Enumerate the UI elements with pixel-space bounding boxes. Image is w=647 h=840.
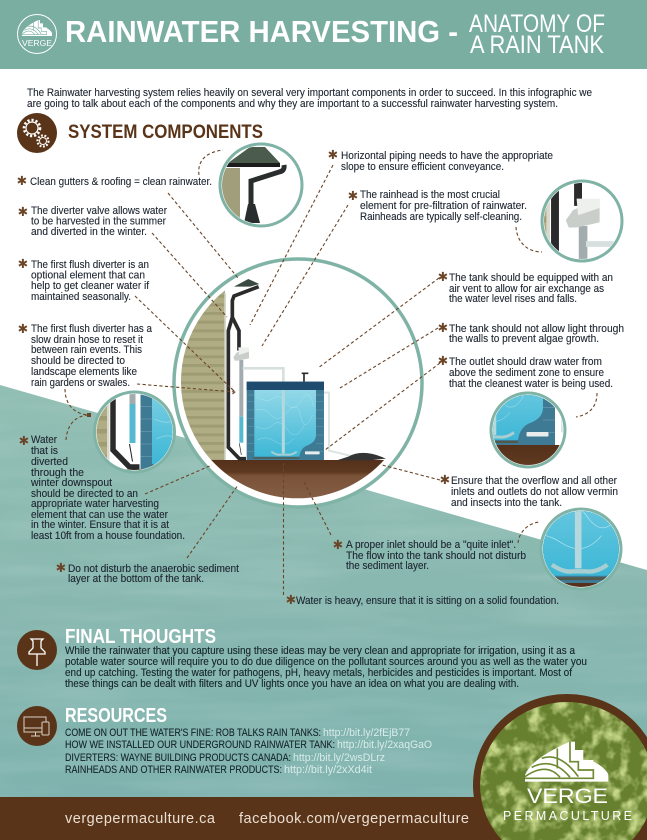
callout: slow drain hose: ✱ xyxy=(18,321,28,336)
callout: winter downspout: diverted xyxy=(31,456,68,468)
callout: quiet inlet: ✱ xyxy=(333,537,343,552)
callout: winter downspout: Water xyxy=(31,434,57,446)
callout: light and algae: The tank should not allow light through xyxy=(449,323,624,335)
callout: air vent: the water level rises and falls. xyxy=(449,293,577,305)
resources xyxy=(65,705,432,776)
subtitle xyxy=(469,10,605,59)
water background xyxy=(0,385,647,797)
brand badge xyxy=(470,694,647,840)
detail circle: outlet xyxy=(490,392,566,468)
footer website: vergepermaculture.ca xyxy=(65,811,216,827)
detail circle: gutter xyxy=(220,144,302,226)
callout: air vent: ✱ xyxy=(438,269,448,284)
subtitle: A RAIN TANK xyxy=(470,31,604,59)
callout: slow drain hose: landscape elements like xyxy=(31,366,137,378)
callout: first flush diverter: optional element that can xyxy=(31,270,145,282)
callout: outlet xyxy=(438,353,613,390)
title: RAINWATER HARVESTING - xyxy=(65,14,458,49)
detail circle: quiet inlet xyxy=(540,508,622,590)
callout: winter downspout: should be directed to an xyxy=(31,488,138,500)
final thoughts: While the rainwater that you capture using these ideas may be very clean and appropriate for irrigation, using it as a xyxy=(65,645,576,657)
brand mark xyxy=(525,742,608,782)
icon: push pin xyxy=(17,630,57,670)
callout: air vent: The tank should be equipped with an xyxy=(449,272,613,284)
callout: vermin: ✱ xyxy=(440,472,450,487)
detail circle: rainhead xyxy=(540,180,624,262)
callout: winter downspout: in the winter. Ensure that it is at xyxy=(31,519,169,531)
callout: winter downspout xyxy=(19,433,185,542)
footer facebook: facebook.com/vergepermaculture xyxy=(239,811,469,827)
resources: http://bit.ly/2wsDLrz xyxy=(293,752,385,764)
header logo: VERGE xyxy=(22,38,52,48)
intro text: The Rainwater harvesting system relies heavily on several very important components in order to succeed. In this infographic we xyxy=(27,87,592,99)
callout: air vent xyxy=(438,269,613,305)
callout: anaerobic sediment: layer at the bottom of the tank. xyxy=(68,573,204,585)
subtitle: ANATOMY OF xyxy=(469,10,605,38)
callout: vermin: inlets and outlets do not allow vermin xyxy=(451,486,618,498)
callout: quiet inlet xyxy=(333,537,526,572)
callout: vermin: and insects into the tank. xyxy=(451,497,562,509)
callout: diverter valve xyxy=(18,204,167,238)
callout: first flush diverter: maintained seasonally. xyxy=(31,291,131,303)
brand name: VERGE xyxy=(527,785,608,808)
final thoughts xyxy=(65,626,587,690)
callout: light and algae: the walls to prevent algae growth. xyxy=(449,333,599,345)
callout: diverter valve: ✱ xyxy=(18,204,28,219)
callout: rainhead: The rainhead is the most crucial xyxy=(360,189,500,201)
detail circle: first flush drain xyxy=(93,390,176,474)
callout: horizontal piping: ✱ xyxy=(328,147,338,162)
callout: winter downspout: element that can use the water xyxy=(31,509,168,521)
resources: http://bit.ly/2fEjB77 xyxy=(323,727,410,739)
callout: slow drain hose: The first flush diverter has a xyxy=(31,323,153,335)
callout: first flush diverter: ✱ xyxy=(18,256,28,271)
callout: outlet: that the cleanest water is being used. xyxy=(449,378,613,390)
icon: gears xyxy=(17,113,57,153)
main tank illustration xyxy=(174,259,422,507)
callout: rainhead: Rainheads are typically self-cleaning. xyxy=(360,211,522,223)
callout: quiet inlet: the sediment layer. xyxy=(346,560,429,572)
callout: clean gutters: ✱ xyxy=(17,173,27,188)
callout: clean gutters xyxy=(17,173,212,188)
callout: rainhead xyxy=(348,188,527,223)
callout: anaerobic sediment: ✱ xyxy=(56,560,66,575)
callout: rainhead: element for pre-filtration of rainwater. xyxy=(360,200,527,212)
footer bar xyxy=(0,797,647,840)
callout: outlet: ✱ xyxy=(438,353,448,368)
callout: quiet inlet: A proper inlet should be a "quite inlet". xyxy=(346,539,516,551)
callout: slow drain hose: should be directed to xyxy=(31,355,125,367)
callout: quiet inlet: The flow into the tank should not disturb xyxy=(346,550,526,562)
callout: anaerobic sediment xyxy=(56,560,239,585)
final thoughts: potable water source will require you to do due diligence on the pollutant sources around you as well as the water you xyxy=(65,656,587,668)
callout: first flush diverter xyxy=(18,256,150,303)
callout: slow drain hose: rain gardens or swales. xyxy=(31,377,130,389)
callout: vermin xyxy=(440,472,618,509)
final thoughts: these things can be dealt with filters and UV lights once you have an idea on what you are dealing with. xyxy=(65,678,519,690)
dashed leader lines xyxy=(65,150,597,597)
callout: horizontal piping: Horizontal piping needs to have the appropriate xyxy=(341,150,553,162)
final thoughts: end up catching. Testing the water for pathogens, pH, heavy metals, herbicides and pesticides is important. Most of xyxy=(65,667,573,679)
callout: first flush diverter: help to get cleaner water if xyxy=(31,280,150,292)
callout: slow drain hose xyxy=(18,321,153,389)
heading: system components: SYSTEM COMPONENTS xyxy=(68,122,263,143)
callout: rainhead: ✱ xyxy=(348,188,358,203)
callout: vermin: Ensure that the overflow and all other xyxy=(451,475,617,487)
intro text: are going to talk about each of the components and why they are important to a successful rainwater harvesting system. xyxy=(27,98,558,110)
resources: COME ON OUT THE WATER'S FINE: ROB TALKS RAIN TANKS: xyxy=(65,727,321,739)
header logo xyxy=(18,14,56,54)
icon: devices xyxy=(17,706,57,746)
callout: winter downspout: winter downspout xyxy=(30,477,112,489)
resources: RAINHEADS AND OTHER RAINWATER PRODUCTS: xyxy=(65,764,282,776)
callout: light and algae: ✱ xyxy=(438,320,448,335)
callout: horizontal piping xyxy=(328,147,553,173)
callout: winter downspout: least 10ft from a house foundation. xyxy=(31,530,185,542)
callout: diverter valve: The diverter valve allows water xyxy=(31,205,167,217)
callout: foundation: Water is heavy, ensure that it is sitting on a solid foundation. xyxy=(296,595,559,607)
final thoughts: FINAL THOUGHTS xyxy=(65,626,216,648)
callout: clean gutters: Clean gutters & roofing = clean rainwater. xyxy=(30,176,212,188)
callout: outlet: above the sediment zone to ensure xyxy=(449,367,604,379)
callout: slow drain hose: between rain events. This xyxy=(31,344,142,356)
callout: air vent: air vent to allow for air exchange as xyxy=(449,283,604,295)
resources: http://bit.ly/2xXd4it xyxy=(284,764,372,776)
callout: horizontal piping: slope to ensure efficient conveyance. xyxy=(341,161,504,173)
resources: RESOURCES xyxy=(65,705,167,727)
resources: http://bit.ly/2xaqGaO xyxy=(337,739,432,751)
callout: first flush diverter: The first flush diverter is an xyxy=(31,259,149,271)
callout: light and algae xyxy=(438,320,624,345)
intro text xyxy=(27,87,592,110)
callout: slow drain hose: slow drain hose to reset it xyxy=(31,334,143,346)
callout: winter downspout: that is xyxy=(31,445,58,457)
callout: diverter valve: and diverted in the winter. xyxy=(31,226,147,238)
callout: winter downspout: appropriate water harvesting xyxy=(31,498,159,510)
header banner xyxy=(0,0,647,69)
callout: foundation: ✱ xyxy=(286,592,296,607)
brand tagline: PERMACULTURE xyxy=(503,809,632,823)
callout: outlet: The outlet should draw water from xyxy=(449,356,602,368)
callout: winter downspout: ✱ xyxy=(19,433,29,448)
callout: anaerobic sediment: Do not disturb the anaerobic sediment xyxy=(68,563,239,575)
resources: HOW WE INSTALLED OUR UNDERGROUND RAINWATER TANK: xyxy=(65,739,335,751)
resources: DIVERTERS: WAYNE BUILDING PRODUCTS CANADA: xyxy=(65,752,291,764)
callout: diverter valve: to be harvested in the summer xyxy=(31,216,166,228)
callout: winter downspout: through the xyxy=(31,467,84,479)
